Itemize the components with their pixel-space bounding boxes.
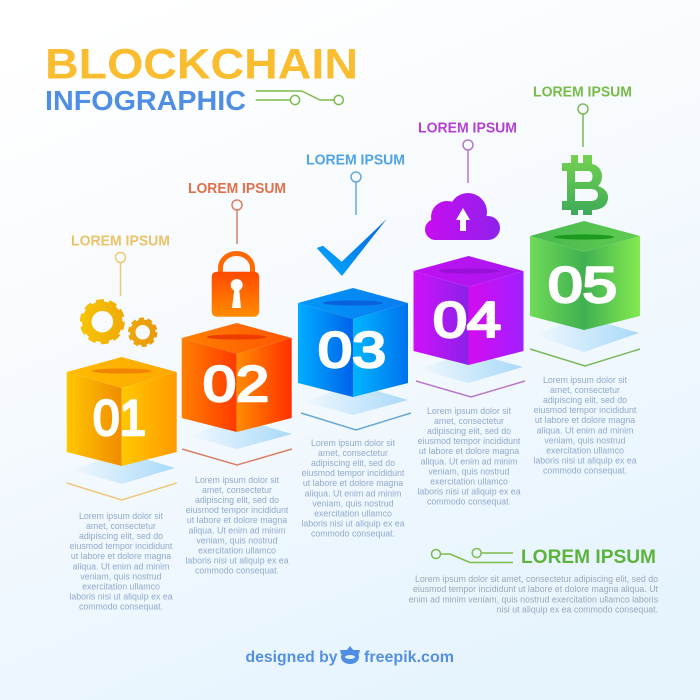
description: laboris nisi ut aliquip ex ea: [301, 518, 405, 528]
description: eiusmod tempor incididunt: [186, 505, 289, 515]
title: [45, 40, 358, 116]
description: eiusmod tempor incididunt ut labore et dolore magna aliqua. Ut: [413, 584, 659, 594]
description: Lorem ipsum dolor sit: [427, 406, 512, 416]
cube: [298, 288, 408, 397]
chevron: [182, 449, 292, 465]
number: 05: [548, 257, 617, 313]
chevron: [530, 349, 640, 366]
description: aliqua. Ut enim ad minim: [421, 456, 517, 466]
number: 01: [93, 390, 146, 446]
pin connector: [578, 104, 588, 147]
description: ut labore et dolore magna: [535, 415, 635, 425]
icon: circuit line: [432, 548, 513, 562]
number: 03: [318, 322, 386, 378]
description: Lorem ipsum dolor sit: [79, 511, 164, 521]
panel: step 02: [182, 181, 292, 575]
description: commodo consequat.: [311, 528, 395, 538]
description: exercitation ullamco: [314, 508, 392, 518]
icon: bitcoin: [562, 155, 608, 215]
description: ut labore et dolore magna: [303, 478, 403, 488]
pin connector: [463, 140, 473, 183]
icon: circuit line: [256, 91, 343, 105]
description: commodo consequat.: [543, 465, 627, 475]
floor shadow: [419, 352, 523, 383]
text: freepik.com: freepik.com: [364, 649, 454, 666]
heading: blockchain: BLOCKCHAIN: [45, 40, 358, 88]
description: adipiscing elit, sed do: [79, 531, 163, 541]
description: laboris nisi ut aliquip ex ea: [185, 555, 289, 565]
description: veniam, quis nostrud: [312, 498, 394, 508]
description: ut labore et dolore magna: [187, 515, 287, 525]
floor shadow: [305, 384, 408, 415]
label: LOREM IPSUM: [71, 234, 170, 250]
description: exercitation ullamco: [546, 445, 624, 455]
panel: step 01: [67, 234, 177, 611]
description: veniam, quis nostrud: [80, 571, 162, 581]
chevron: [67, 483, 177, 500]
label: LOREM IPSUM: [418, 120, 517, 136]
cube: [530, 221, 640, 330]
description: Lorem ipsum dolor sit: [543, 375, 628, 385]
pin connector: [232, 200, 242, 244]
footer credit: [246, 646, 454, 666]
description: Lorem ipsum dolor sit: [311, 438, 396, 448]
description: ut labore et dolore magna: [71, 551, 171, 561]
description: adipiscing elit, sed do: [195, 495, 279, 505]
description: eiusmod tempor incididunt: [534, 405, 637, 415]
icon: gears: [82, 301, 156, 345]
panel: step 03: [298, 152, 411, 538]
description: veniam, quis nostrud: [544, 435, 626, 445]
pin connector: [351, 172, 361, 215]
description: Lorem ipsum dolor sit amet, consectetur adipiscing elit, sed do: [415, 574, 658, 584]
description: aliqua. Ut enim ad minim: [73, 561, 169, 571]
description: exercitation ullamco: [198, 545, 276, 555]
panel: step 04: [414, 120, 525, 506]
description: ut labore et dolore magna: [419, 446, 519, 456]
description: adipiscing elit, sed do: [427, 426, 511, 436]
description: adipiscing elit, sed do: [311, 458, 395, 468]
description: eiusmod tempor incididunt: [302, 468, 405, 478]
description: commodo consequat.: [195, 565, 279, 575]
description: veniam, quis nostrud: [196, 535, 278, 545]
cube: [67, 357, 177, 466]
description: amet, consectetur: [434, 416, 504, 426]
cube: [414, 256, 524, 365]
description: amet, consectetur: [86, 521, 156, 531]
description: exercitation ullamco: [430, 476, 508, 486]
label: LOREM IPSUM: [533, 84, 632, 100]
description: veniam, quis nostrud: [428, 466, 510, 476]
floor shadow: [190, 418, 292, 449]
icon: check mark: [317, 219, 387, 276]
description: amet, consectetur: [550, 385, 620, 395]
description: aliqua. Ut enim ad minim: [537, 425, 633, 435]
label: LOREM IPSUM: [188, 181, 286, 197]
heading: LOREM IPSUM: [521, 546, 656, 568]
cube: [182, 323, 292, 432]
description: nisi ut aliquip ex ea commodo consequat.: [497, 605, 658, 615]
icon: cloud upload: [425, 193, 500, 240]
description: eiusmod tempor incididunt: [70, 541, 173, 551]
description: amet, consectetur: [318, 448, 388, 458]
text: designed by: designed by: [246, 649, 338, 666]
description: enim ad minim veniam, quis nostrud exercitation ullamco laboris: [409, 594, 659, 604]
description: commodo consequat.: [427, 496, 511, 506]
description: laboris nisi ut aliquip ex ea: [417, 486, 521, 496]
icon: padlock: [212, 254, 259, 317]
number: 02: [203, 356, 269, 412]
pin connector: [116, 252, 126, 296]
description: aliqua. Ut enim ad minim: [189, 525, 285, 535]
description: Lorem ipsum dolor sit: [195, 475, 280, 485]
panel: summary: [409, 546, 659, 615]
floor shadow: [73, 452, 175, 484]
label: LOREM IPSUM: [306, 152, 405, 168]
description: amet, consectetur: [202, 485, 272, 495]
description: commodo consequat.: [79, 601, 163, 611]
icon: freepik logo: [340, 646, 360, 664]
description: aliqua. Ut enim ad minim: [305, 488, 401, 498]
description: laboris nisi ut aliquip ex ea: [69, 591, 173, 601]
description: exercitation ullamco: [82, 581, 160, 591]
panel: step 05: [530, 84, 640, 475]
heading: infographic: INFOGRAPHIC: [45, 85, 246, 116]
description: adipiscing elit, sed do: [543, 395, 627, 405]
floor shadow: [534, 317, 639, 352]
chevron: [416, 381, 525, 397]
description: eiusmod tempor incididunt: [418, 436, 521, 446]
number: 04: [433, 292, 501, 348]
description: laboris nisi ut aliquip ex ea: [533, 455, 637, 465]
chevron: [301, 413, 411, 430]
